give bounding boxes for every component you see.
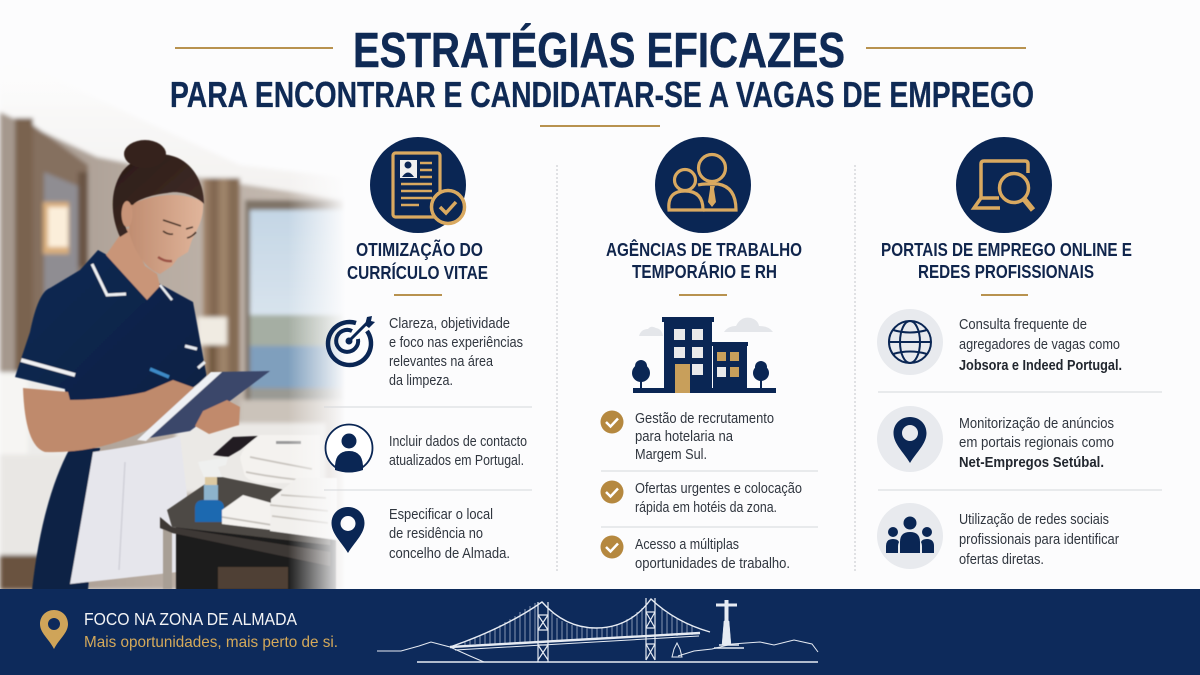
text: clarity: Clareza, objetividade [389,316,510,332]
clipboard [137,371,270,440]
arm [23,380,195,452]
icon: contact person [326,424,372,472]
spray bottle [195,457,228,522]
text: residence: concelho de Almada. [389,546,510,562]
footer banner [0,589,1200,675]
neck [106,228,160,300]
hair [113,154,204,237]
footer tagline: Mais oportunidades, mais perto de si. [84,634,338,651]
panel: online job portals [877,137,1162,569]
item: recruitment: para hotelaria na [635,429,733,445]
towels [222,435,337,540]
text: contact data [389,434,527,469]
text: social networks: Utilização de redes sociais [959,512,1109,528]
text: aggregators [959,317,1122,374]
text: regional portals [959,416,1114,471]
ear [122,201,132,227]
heading: CV: CURRÍCULO VITAE [347,262,488,283]
pen [150,369,169,377]
panel: CV optimisation [324,137,532,562]
heading: agencies [606,239,802,282]
photo: housekeeper in hotel room [0,50,366,590]
text: contact data: Incluir dados de contacto [389,434,527,450]
heading: agencies: AGÊNCIAS DE TRABALHO [606,239,802,260]
housekeeper figure [15,140,270,590]
text: aggregators: Consulta frequente de [959,317,1087,333]
text: clarity: relevantes na área [389,354,493,370]
hotel room background [0,52,345,590]
icon: recruiters [655,137,751,233]
apron [70,436,196,584]
bun [124,140,166,168]
photo top fade [0,50,366,112]
collar [92,264,126,295]
icon: hotel building [632,317,776,393]
heading: agencies: TEMPORÁRIO E RH [632,261,777,282]
item: urgent offers [600,480,802,516]
item: urgent offers: rápida em hotéis da zona. [635,500,777,516]
text: regional portals: Monitorização de anúncios [959,416,1114,432]
icon: location pin [332,507,364,553]
title block [170,24,1034,127]
face [129,195,203,274]
text: residence: Especificar o local [389,507,493,523]
title: ESTRATÉGIAS EFICAZES [353,24,845,78]
text: clarity: da limpeza. [389,373,453,389]
heading: portals: PORTAIS DE EMPREGO ONLINE E [881,240,1132,260]
panel: temp agencies [600,137,818,572]
heading: CV: OTIMIZAÇÃO DO [356,239,483,260]
text: regional portals: em portais regionais como [959,435,1114,451]
heading: portals [881,240,1132,282]
text: contact data: atualizados em Portugal. [389,453,524,469]
icon: regional pin [877,406,943,472]
heading: CV [347,239,488,283]
heading: portals: REDES PROFISSIONAIS [918,262,1094,282]
text: aggregators: agregadores de vagas como [959,337,1120,353]
text: clarity [389,316,523,389]
icon: computer and magnifier [956,137,1052,233]
icon: people group [877,503,943,569]
item: multiple opportunities: Acesso a múltiplas [635,537,739,553]
skirt [32,448,100,590]
sleeve trim [21,360,75,375]
item: multiple opportunities: oportunidades de trabalho. [635,556,790,572]
icon: target [328,316,375,365]
icon: globe [877,309,943,375]
text: social networks: profissionais para identificar [959,532,1119,548]
text: aggregators: Jobsora e Indeed Portugal. [959,358,1122,374]
eyes and mouth [163,220,196,238]
item: multiple opportunities [600,536,790,572]
item: urgent offers: Ofertas urgentes e colocação [635,481,802,497]
icon: CV document [370,137,466,233]
icon: gold pin [40,610,68,649]
housekeeping cart [160,435,337,590]
item: recruitment: Gestão de recrutamento [635,411,774,427]
text: social networks [959,512,1119,568]
photo right fade [288,50,366,590]
text: social networks: ofertas diretas. [959,552,1044,568]
text: residence: de residência no [389,526,483,542]
text: clarity: e foco nas experiências [389,335,523,351]
item: recruitment: Margem Sul. [635,447,707,463]
text: regional portals: Net-Empregos Setúbal. [959,455,1104,471]
other hand [195,400,240,434]
text: residence [389,507,510,562]
footer heading: FOCO NA ZONA DE ALMADA [84,609,297,629]
illustration: 25 de Abril bridge and Cristo Rei [377,598,818,662]
uniform [15,250,207,437]
item: recruitment [600,410,774,463]
